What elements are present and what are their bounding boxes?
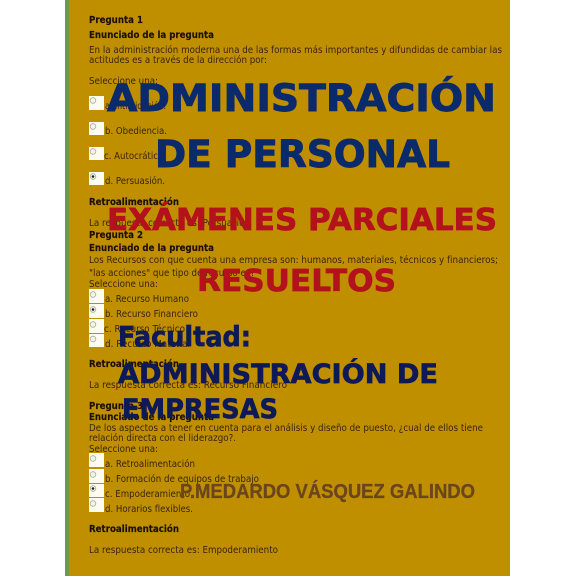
faculty: Facultad: (118, 320, 251, 353)
question 2 block: Los Recursos con que cuenta una empresa son: humanos, materiales, técnicos y financieros; (89, 254, 498, 266)
question 2 block: d. Recurso Material (105, 339, 190, 350)
subtitle (107, 202, 497, 299)
title: ADMINISTRACIÓN (107, 76, 496, 120)
faculty (118, 320, 438, 425)
question 2 block: Seleccione una: (89, 279, 158, 290)
title: DE PERSONAL (155, 133, 450, 176)
question 2 block: Enunciado de la pregunta (89, 243, 214, 254)
question 1 block: Enunciado de la pregunta (89, 30, 214, 41)
question 2 block: La respuesta correcta es: Recurso Financiero (89, 380, 287, 391)
question 3 block: a. Retroalimentación (105, 458, 195, 470)
green spine strip (65, 0, 69, 576)
cover background (65, 0, 510, 576)
question 1 block: Seleccione una: (89, 76, 158, 87)
question 1 block: Retroalimentación (89, 196, 179, 208)
question 1 block: La respuesta correcta es: Persuasión (89, 217, 250, 229)
question 3 block: c. Empoderamiento (105, 489, 190, 500)
question 3 block (89, 401, 483, 556)
question 3 block: b. Formación de equipos de trabajo (105, 473, 259, 485)
question 1 block: Pregunta 1 (89, 15, 143, 26)
question 1 block (89, 15, 502, 229)
question 3 block: De los aspectos a tener en cuenta para el análisis y diseño de puesto, ¿cual de ellos tiene (89, 422, 483, 434)
subtitle: EXÁMENES PARCIALES (107, 202, 497, 238)
question 1 block: actitudes es a través de la dirección por: (89, 54, 267, 66)
question 3 block: d. Horarios flexibles. (105, 504, 193, 515)
question 3 block: Enunciado de la pregunta (89, 412, 214, 423)
question 1 block: b. Obediencia. (105, 126, 167, 137)
question 2 block: b. Recurso Financiero (105, 309, 198, 320)
question 3 block: La respuesta correcta es: Empoderamiento (89, 545, 278, 556)
faculty: ADMINISTRACIÓN DE (118, 358, 438, 390)
question 2 block (89, 230, 498, 391)
question 2 block: "las acciones" que tipo de recurso es? (89, 268, 255, 279)
question 2 block: Pregunta 2 (89, 230, 143, 241)
question 1 block: d. Persuasión. (105, 175, 165, 187)
question 2 block: a. Recurso Humano (105, 294, 189, 305)
author: P.MEDARDO VÁSQUEZ GALINDO (180, 480, 475, 503)
question 1 block: En la administración moderna una de las formas más importantes y difundidas de cambiar las (89, 44, 502, 56)
question 3 block: relación directa con el liderazgo?. (89, 432, 236, 444)
question 2 block: Retroalimentación (89, 358, 179, 370)
question 1 block: c. Autocrática. (104, 150, 166, 162)
subtitle: RESUELTOS (197, 264, 396, 299)
question 3 block: Seleccione una: (89, 444, 158, 455)
question 1 block: a. Intimidación. (105, 100, 166, 112)
question 3 block: Retroalimentación (89, 523, 179, 535)
question 3 block: Pregunta 3 (89, 401, 143, 412)
question 2 block: c. Recurso Técnico (104, 323, 185, 335)
faculty: EMPRESAS (122, 394, 278, 425)
title (107, 76, 496, 176)
